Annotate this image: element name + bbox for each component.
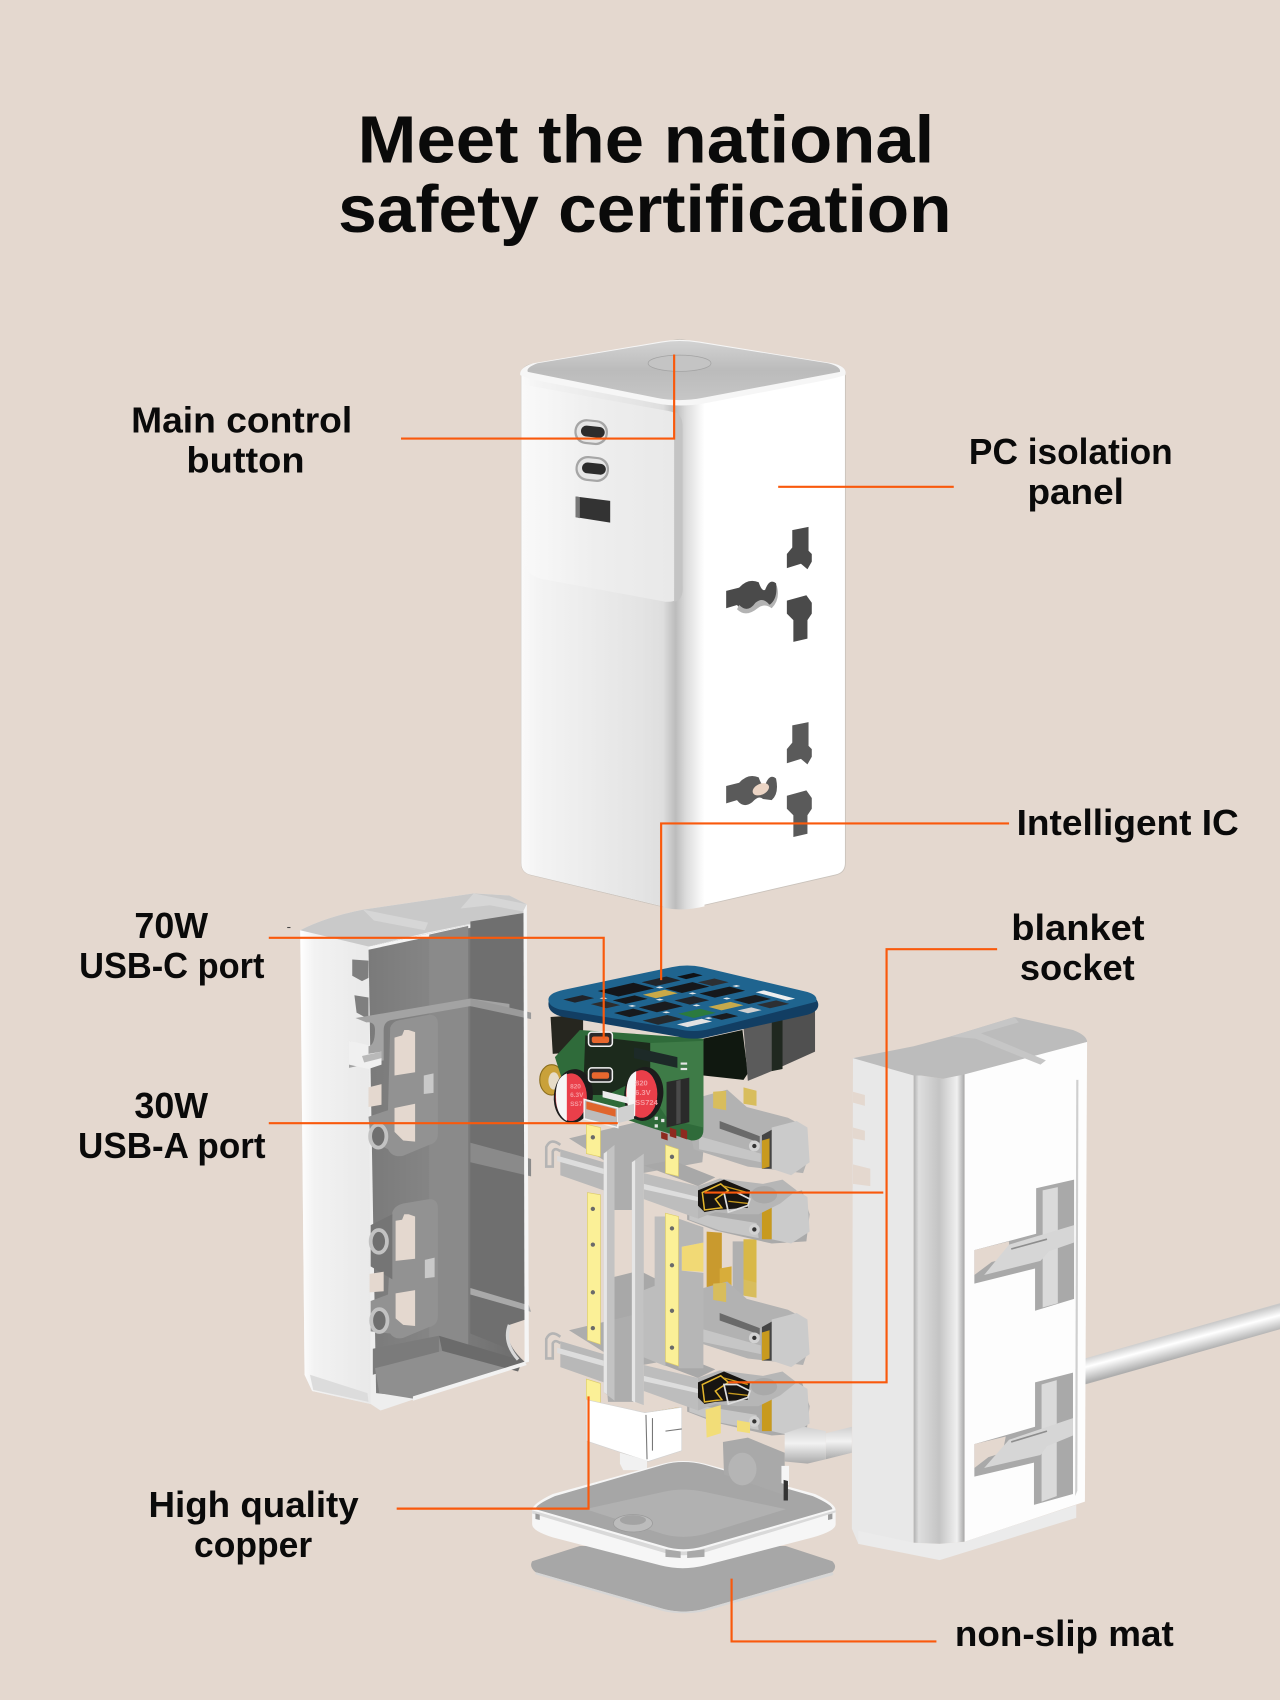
lower mount plate	[371, 1199, 438, 1338]
blue IC board	[548, 965, 818, 1039]
product: non-slip mat	[531, 1546, 835, 1613]
cord slot	[508, 1318, 529, 1362]
socket end	[772, 1121, 810, 1175]
top cap	[520, 340, 846, 405]
rails and bands	[470, 1143, 531, 1176]
callout: high quality copper	[148, 1396, 589, 1565]
upper mount plate	[369, 1015, 438, 1156]
callout: PC isolation panel: PC isolation	[969, 432, 1173, 472]
callout: main control button: Main control	[131, 401, 352, 441]
USB-A port	[576, 497, 610, 523]
callout: 70W USB-C port: USB-C port	[79, 946, 265, 986]
red capacitor left: SS7	[570, 1101, 583, 1108]
left face	[521, 375, 680, 910]
tab notches	[853, 1092, 870, 1186]
title	[338, 103, 952, 247]
USB-C port 2	[574, 455, 610, 483]
USB-C port 1	[573, 418, 609, 446]
rounded corner band	[914, 1073, 965, 1544]
callout: non-slip mat: non-slip mat	[955, 1614, 1174, 1654]
upper socket	[726, 527, 812, 642]
callout: 30W USB-A port	[78, 1086, 618, 1166]
rear right block	[689, 1090, 809, 1173]
gold flats	[713, 1087, 757, 1110]
power cable	[1085, 1303, 1280, 1385]
top surface	[853, 1017, 1087, 1079]
inductor	[667, 1078, 689, 1128]
power button	[648, 355, 711, 371]
vertical frame columns	[604, 1145, 615, 1401]
red capacitor right: SS724	[635, 1098, 659, 1107]
lower socket cutout	[974, 1373, 1073, 1505]
callout: blanket socket: socket	[1020, 948, 1135, 988]
gold terminal strips	[586, 1124, 678, 1415]
gold capacitor	[540, 1065, 564, 1095]
callout: non-slip mat	[732, 1579, 1174, 1654]
tiny mark	[287, 927, 290, 928]
product: right housing shell	[852, 1017, 1087, 1560]
bottom lip	[858, 1505, 1076, 1560]
USB-A connector	[584, 1091, 634, 1128]
callout: blanket socket	[704, 908, 1145, 1382]
left tab	[546, 1142, 560, 1167]
corner shading	[663, 401, 704, 909]
ghost module behind frame	[613, 1271, 661, 1340]
product: left housing shell	[300, 893, 531, 1411]
red capacitor left: 6.3V	[570, 1092, 584, 1099]
callout: high quality copper: copper	[194, 1525, 312, 1565]
callout: PC isolation panel: panel	[1027, 472, 1124, 512]
callout: 30W USB-A port: USB-A port	[78, 1126, 266, 1166]
callout: PC isolation panel	[778, 432, 1173, 512]
red capacitor right: 6.3V	[635, 1088, 651, 1097]
title: Meet the national	[358, 103, 934, 178]
callout: high quality copper: High quality	[148, 1485, 359, 1525]
screw bosses	[370, 1125, 387, 1332]
product: cord plug	[723, 1427, 852, 1501]
upper socket module	[546, 1087, 810, 1244]
callout: main control button: button	[186, 441, 305, 481]
callout: main control button	[131, 355, 674, 481]
side frame panels	[644, 1216, 665, 1366]
black and gold contact	[698, 1180, 750, 1212]
lower socket	[726, 722, 812, 837]
red capacitor left	[551, 1067, 596, 1125]
center block	[644, 1160, 715, 1186]
lower socket module	[546, 1279, 810, 1435]
small square tabs	[424, 1073, 435, 1278]
white small parts	[655, 1062, 687, 1128]
product: circuit boards	[540, 965, 818, 1141]
product: copper terminal block	[586, 1400, 682, 1470]
callout: intelligent IC: Intelligent IC	[1017, 803, 1239, 843]
product: assembled top housing	[520, 339, 846, 910]
title: safety certification	[338, 172, 952, 247]
green vertical PCB	[555, 1030, 703, 1141]
upper socket cutout	[974, 1180, 1074, 1311]
bridge behind	[569, 1119, 704, 1210]
rear gold strips	[682, 1232, 757, 1297]
top rim	[300, 893, 527, 946]
floor	[373, 1336, 439, 1375]
face plate	[698, 1179, 797, 1219]
red capacitor right	[622, 1065, 666, 1123]
lower gold tabs	[651, 1407, 678, 1429]
USB-C connector second	[589, 1068, 612, 1082]
shell outer silhouette	[300, 893, 529, 1411]
product: internal socket modules	[546, 1087, 810, 1438]
callout: 70W USB-C port	[79, 906, 604, 1039]
left block	[560, 1149, 604, 1190]
wiring ledge	[349, 999, 509, 1068]
port window panel	[525, 385, 683, 602]
callout: blanket socket: blanket	[1011, 908, 1145, 948]
left side panel	[852, 1047, 914, 1544]
black transformers	[551, 1015, 583, 1054]
exterior white face	[300, 930, 371, 1404]
notches in shell edge	[352, 960, 369, 1019]
callout: 30W USB-A port: 30W	[134, 1086, 208, 1126]
lower right block	[687, 1190, 810, 1244]
front white face	[965, 1042, 1087, 1542]
central rib	[429, 926, 468, 1357]
red capacitor left: 820	[570, 1084, 581, 1091]
red capacitor right: 820	[635, 1078, 648, 1087]
callout: 70W USB-C port: 70W	[134, 906, 208, 946]
small red parts	[661, 1128, 687, 1141]
callout: intelligent IC	[661, 803, 1239, 980]
USB-C connector 70W	[589, 1032, 612, 1046]
board components	[562, 970, 804, 1030]
product: base tray	[532, 1461, 836, 1568]
